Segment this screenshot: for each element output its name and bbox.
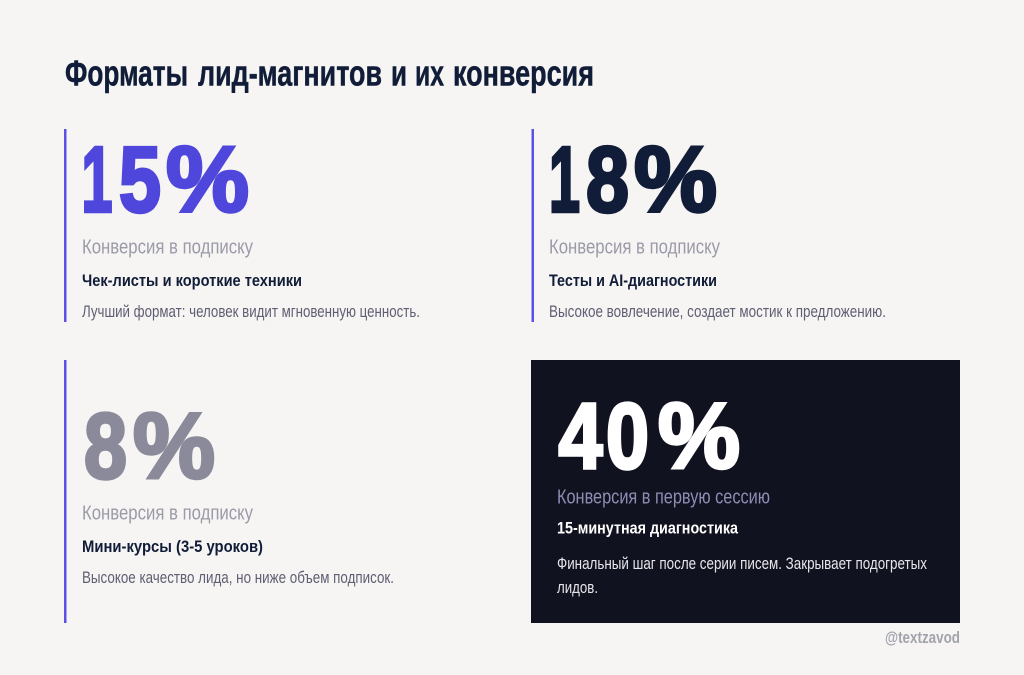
label: subscription conversion: Конверсия в подписку: [82, 236, 254, 258]
stat: 18%: 8: [586, 128, 629, 232]
description: лидов.: [557, 579, 598, 597]
stat: 15%: 5: [119, 128, 161, 232]
description: Финальный шаг после серии писем. Закрывает подогретых: [557, 555, 928, 573]
format name: Чек-листы и короткие техники: [82, 271, 302, 290]
stat: 18%: 1: [549, 128, 580, 232]
description: [557, 555, 928, 597]
stat: 8%: [84, 394, 215, 498]
panel: checklists 15%: [64, 128, 420, 322]
credit handle: @textzavod: [885, 628, 960, 647]
title: конверсия: [453, 52, 594, 94]
title: их: [415, 52, 444, 94]
stat: 8%: 8: [84, 394, 127, 498]
title: Форматы: [65, 52, 188, 94]
stat: 40%: 4: [558, 384, 603, 488]
format name: 15-минутная диагностика: [557, 518, 738, 538]
panel: mini-courses 8%: [64, 360, 394, 623]
stat: 18%: [549, 128, 717, 232]
title: лид-магнитов: [198, 52, 382, 94]
stat: 40%: 0: [606, 384, 649, 488]
stat: 15%: [82, 128, 249, 232]
label: first session conversion: Конверсия в первую сессию: [557, 486, 770, 508]
format name: Тесты и AI-диагностики: [549, 271, 717, 290]
stat: 15%: %: [166, 128, 249, 232]
stat: 40%: %: [658, 384, 740, 488]
label: subscription conversion: Конверсия в подписку: [549, 236, 721, 258]
panel: tests 18%: [532, 128, 886, 322]
description: Лучший формат: человек видит мгновенную ценность.: [82, 303, 420, 321]
stat: 40%: [558, 384, 740, 488]
stat: 15%: 1: [82, 128, 112, 232]
description: Высокое вовлечение, создает мостик к предложению.: [549, 303, 886, 321]
format name: Мини-курсы (3-5 уроков): [82, 537, 263, 556]
stat: 18%: %: [634, 128, 717, 232]
label: subscription conversion: Конверсия в подписку: [82, 502, 254, 524]
panel: diagnostic 40% dark card: [531, 360, 960, 623]
title: [65, 52, 594, 94]
stat: 8%: %: [133, 394, 215, 498]
title: и: [391, 52, 407, 94]
description: Высокое качество лида, но ниже объем подписок.: [82, 569, 394, 587]
